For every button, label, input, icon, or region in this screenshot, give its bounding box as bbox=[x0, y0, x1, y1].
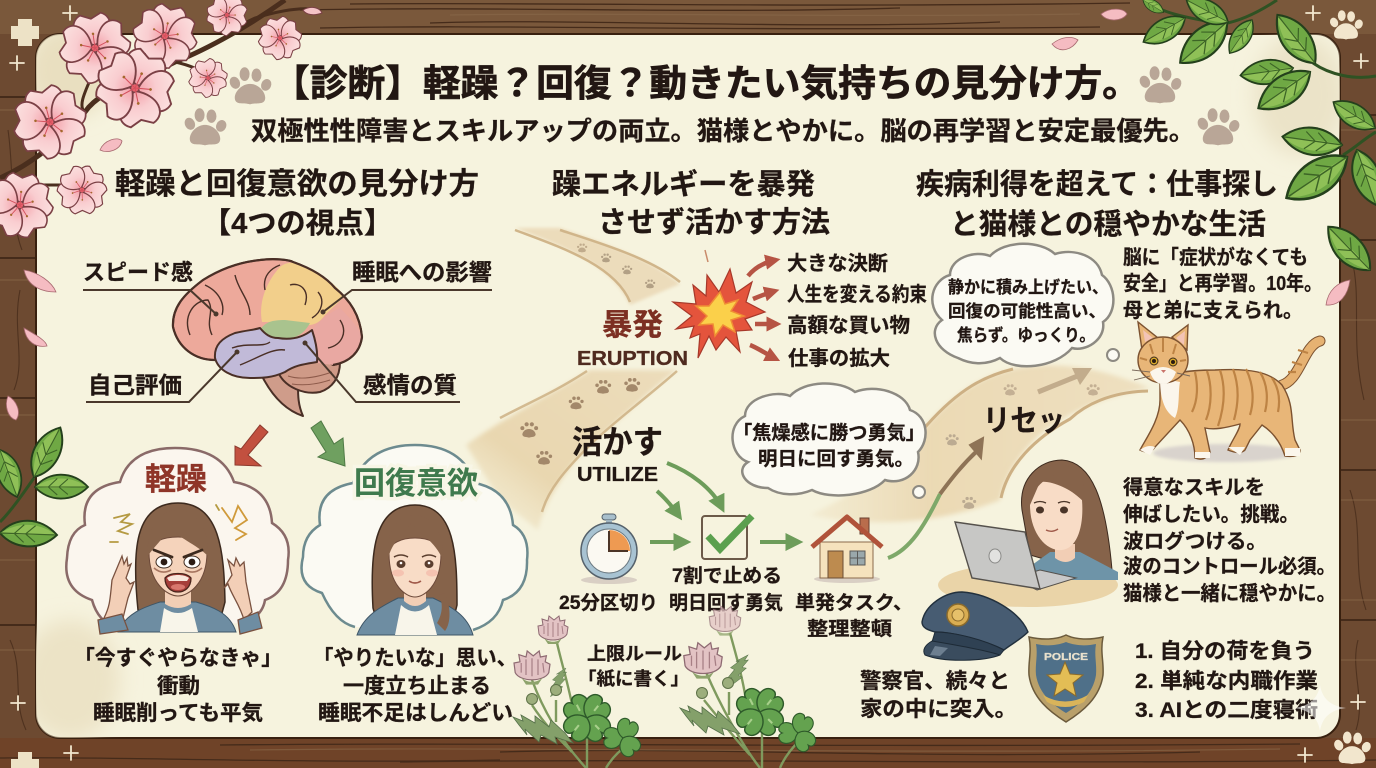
thought cloud: calm build-up bbox=[932, 244, 1119, 366]
thought cloud: courage bbox=[733, 383, 926, 498]
label: eruption: 暴発 bbox=[602, 309, 663, 342]
clover plants bbox=[513, 606, 818, 768]
label: eruption: ERUPTION bbox=[577, 348, 688, 370]
heading: column 3: と猫様との穏やかな生活 bbox=[950, 208, 1266, 241]
path: winding trail lower bbox=[466, 370, 677, 530]
list: eruption examples: 大きな決断 bbox=[787, 252, 888, 275]
caption: recovery: 睡眠不足はしんどい bbox=[318, 702, 513, 725]
cloud frame bbox=[302, 445, 527, 630]
heading: hypomania: 軽躁 bbox=[145, 462, 207, 497]
label: self-evaluation bbox=[86, 350, 240, 402]
brain diagram bbox=[83, 259, 492, 416]
label: sleep: 睡眠への影響 bbox=[352, 259, 492, 285]
caption: hypomania: 「今すぐやらなきゃ」 bbox=[74, 647, 282, 670]
caption: recovery: 「やりたいな」思い、 bbox=[313, 647, 517, 670]
list: three steps: 1. 自分の荷を負う bbox=[1135, 640, 1315, 663]
icon: explosion bbox=[673, 250, 765, 358]
label: eruption bbox=[577, 309, 688, 370]
note: cap rule bbox=[578, 644, 689, 689]
label: utilize bbox=[572, 424, 663, 486]
title: 【診断】軽躁？回復？動きたい気持ちの見分け方。 bbox=[272, 63, 1140, 104]
captions: utilize steps: 単発タスク、 bbox=[795, 592, 913, 614]
caption: hypomania: 睡眠削っても平気 bbox=[93, 702, 263, 725]
label: self-evaluation: 自己評価 bbox=[88, 372, 182, 398]
thought cloud: calm build-up: 回復の可能性高い、 bbox=[948, 301, 1106, 321]
heading: column 2: 躁エネルギーを暴発 bbox=[552, 168, 815, 201]
path: winding trail to the cat bbox=[810, 365, 1150, 522]
heading: column 1: 【4つの視点】 bbox=[202, 207, 393, 240]
brain illustration bbox=[173, 259, 362, 416]
panel: recovery motivation bbox=[302, 445, 527, 725]
list: three steps: 2. 単純な内職作業 bbox=[1135, 670, 1318, 693]
text: skills bbox=[1123, 476, 1336, 605]
note: cap rule: 「紙に書く」 bbox=[578, 668, 689, 689]
icon: timer bbox=[581, 514, 637, 584]
arrow: to reset bbox=[888, 438, 983, 558]
heading: recovery: 回復意欲 bbox=[354, 466, 478, 501]
list: eruption examples bbox=[787, 252, 927, 370]
flower cluster bbox=[0, 0, 307, 244]
heading: column 2 bbox=[552, 168, 830, 239]
subtitle: 双極性性障害とスキルアップの両立。猫様とやかに。脳の再学習と安定最優先。 bbox=[251, 116, 1195, 146]
text: police bbox=[860, 670, 1017, 721]
woman: agitated bbox=[118, 503, 236, 632]
text: brain relearning: 脳に「症状がなくても bbox=[1123, 245, 1308, 269]
text: police: 警察官、続々と bbox=[860, 670, 1010, 693]
panel: hypomania bbox=[66, 448, 289, 725]
hands: agitated bbox=[98, 556, 262, 634]
text: brain relearning: 母と弟に支えられ。 bbox=[1123, 299, 1303, 322]
icon: agitation marks bbox=[110, 505, 247, 542]
heading: column 1 bbox=[115, 168, 479, 240]
branch: cherry blossom corner bbox=[0, 0, 322, 244]
petals falling bbox=[6, 9, 1350, 420]
label: utilize: UTILIZE bbox=[577, 464, 658, 486]
captions: utilize steps: 25分区切り bbox=[559, 592, 658, 614]
note: cap rule: 上限ルール bbox=[587, 644, 682, 664]
text: brain relearning: 安全」と再学習。10年。 bbox=[1123, 272, 1322, 295]
arrow: to recovery bbox=[311, 421, 345, 466]
icon: checkbox bbox=[702, 516, 752, 559]
text: skills: 波ログつける。 bbox=[1123, 529, 1267, 553]
icon: police badge: POLICE bbox=[1044, 652, 1088, 663]
text: police: 家の中に突入。 bbox=[860, 698, 1017, 721]
woman: calm bbox=[357, 505, 473, 635]
label: emotional quality bbox=[302, 340, 460, 402]
text: skills: 伸ばしたい。挑戦。 bbox=[1123, 503, 1299, 526]
label: reset: リセッ bbox=[983, 405, 1065, 438]
captions: utilize steps: 整理整頓 bbox=[807, 618, 892, 640]
icon: police badge bbox=[1029, 635, 1103, 722]
list: eruption examples: 仕事の拡大 bbox=[788, 347, 890, 370]
caption: recovery bbox=[313, 647, 517, 725]
arrow: to hypomania bbox=[235, 425, 268, 466]
text: brain relearning bbox=[1123, 245, 1322, 322]
text: skills: 波のコントロール必須。 bbox=[1123, 555, 1336, 578]
text: skills: 得意なスキルを bbox=[1123, 476, 1265, 499]
path: winding trail upper bbox=[515, 228, 680, 305]
heading: column 3: 疾病利得を超えて：仕事探し bbox=[916, 168, 1278, 201]
captions: utilize steps: 明日回す勇気 bbox=[669, 592, 783, 614]
label: speed: スピード感 bbox=[83, 260, 193, 285]
list: eruption examples: 人生を変える約束 bbox=[787, 283, 927, 306]
caption: recovery: 一度立ち止まる bbox=[343, 675, 491, 698]
sparkle watermark bbox=[1294, 685, 1346, 731]
list: eruption examples: 高額な買い物 bbox=[787, 314, 910, 337]
thought cloud: courage: 「焦燥感に勝つ勇気」 bbox=[733, 421, 925, 444]
list: three steps bbox=[1135, 640, 1318, 722]
heading: column 3 bbox=[916, 168, 1278, 241]
arrows: utilize to steps bbox=[650, 463, 798, 542]
laptop bbox=[955, 522, 1076, 590]
thought cloud: calm build-up: 静かに積み上げたい、 bbox=[948, 278, 1108, 297]
illustration: tabby cat bbox=[1132, 322, 1320, 462]
heading: column 2: させず活かす方法 bbox=[598, 206, 830, 239]
illustration: woman with laptop bbox=[938, 460, 1118, 607]
captions: utilize steps: 7割で止める bbox=[672, 565, 782, 587]
thought cloud: calm build-up: 焦らず。ゆっくり。 bbox=[957, 326, 1095, 345]
captions: utilize steps bbox=[559, 565, 913, 640]
leaves: left bbox=[0, 421, 88, 547]
label: sleep bbox=[320, 259, 492, 314]
label: utilize: 活かす bbox=[572, 424, 663, 460]
caption: hypomania bbox=[74, 647, 282, 725]
label: emotional quality: 感情の質 bbox=[363, 372, 457, 398]
text: skills: 猫様と一緒に穏やかに。 bbox=[1123, 582, 1336, 605]
cloud frame bbox=[66, 448, 289, 628]
label: speed bbox=[83, 260, 218, 316]
leaves: top right bbox=[1138, 0, 1376, 280]
caption: hypomania: 衝動 bbox=[157, 675, 200, 698]
arrows: eruption results bbox=[748, 260, 777, 359]
icon: police cap bbox=[922, 592, 1028, 660]
heading: column 1: 軽躁と回復意欲の見分け方 bbox=[115, 168, 479, 201]
thought cloud: courage: 明日に回す勇気。 bbox=[758, 448, 914, 470]
list: three steps: 3. AIとの二度寝術 bbox=[1135, 698, 1318, 722]
paw prints beside title bbox=[183, 66, 1241, 145]
icon: house bbox=[812, 517, 882, 583]
